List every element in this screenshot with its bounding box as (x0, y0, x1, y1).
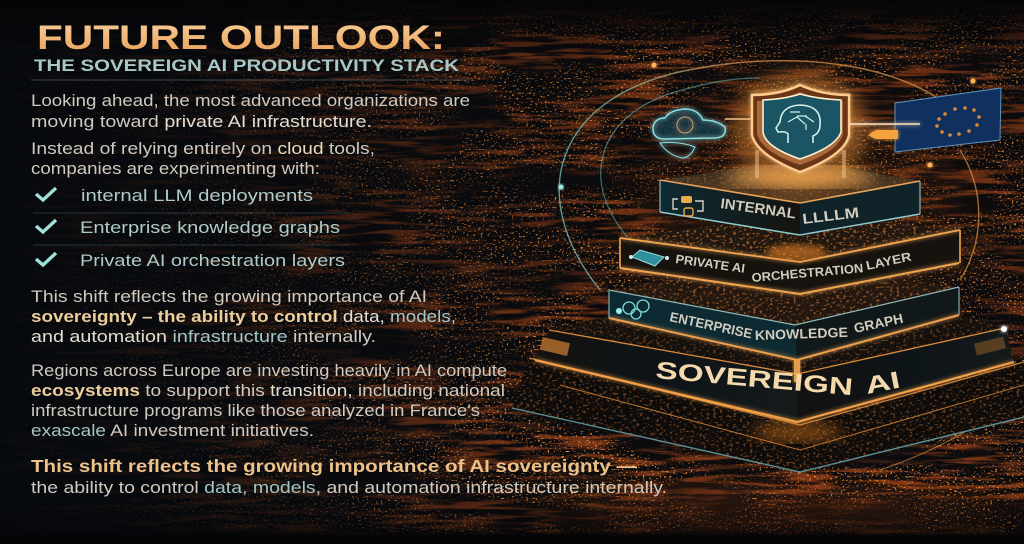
label: PRIVATE AI ORCHESTRATION LAYER: PRIVATE AI (675, 252, 746, 276)
callout: closing statement: the ability to control data, models, and automation infrastructure internally. (31, 478, 667, 497)
label: PRIVATE AI ORCHESTRATION LAYER: ORCHESTRATION (751, 261, 864, 285)
label: PRIVATE AI ORCHESTRATION LAYER (675, 250, 913, 285)
label: ENTERPRISE KNOWLEDGE GRAPH (668, 309, 905, 343)
label: INTERNAL LLLLM: LLLLM (802, 205, 860, 228)
tier: Sovereign AI base (535, 272, 1014, 422)
checklist (33, 186, 350, 270)
icon: connector to shield (725, 118, 752, 120)
arrow: flag to shield (850, 124, 920, 139)
text block: cloud tools (31, 139, 375, 178)
text block: AI sovereignty: This shift reflects the growing importance of AI (31, 287, 427, 306)
label: PRIVATE AI ORCHESTRATION LAYER: LAYER (865, 250, 913, 273)
label: ENTERPRISE KNOWLEDGE GRAPH: ENTERPRISE (668, 309, 754, 341)
item: enterprise knowledge graphs: Enterprise knowledge graphs (80, 218, 340, 237)
item: private AI orchestration layers: Private AI orchestration layers (80, 251, 345, 270)
text block: Europe compute: Regions across Europe are investing heavily in AI compute (31, 361, 507, 380)
text block: cloud tools: companies are experimenting with: (31, 159, 320, 178)
text block: Europe compute: ecosystems to support this transition, including national (31, 381, 505, 400)
tier: Internal LLM (660, 160, 920, 235)
icon: check 2 (36, 220, 56, 232)
label: SOVEREIGN AI: AI (863, 367, 903, 400)
icon: check 1 (36, 188, 56, 200)
text block: cloud tools: Instead of relying entirely on cloud tools, (31, 139, 375, 158)
lower platform (512, 358, 1024, 472)
label: SOVEREIGN AI: SOVEREIGN (654, 357, 854, 401)
text block: Europe compute: exascale AI investment initiatives. (31, 421, 314, 440)
title: FUTURE OUTLOOK: (37, 19, 445, 57)
label: INTERNAL LLLLM: INTERNAL (719, 196, 797, 223)
orbit arcs (558, 61, 1024, 470)
icon: LLM module (673, 196, 703, 216)
text block: private infrastructure intro: moving toward private AI infrastructure. (31, 112, 372, 131)
subtitle: THE SOVEREIGN AI PRODUCTIVITY STACK (34, 57, 459, 75)
icon: cloud (653, 109, 725, 158)
text block: AI sovereignty: and automation infrastructure internally. (31, 327, 376, 346)
item: internal LLM deployments: internal LLM deployments (81, 186, 313, 205)
icon: knowledge graph (616, 300, 649, 319)
tier: Private AI Orchestration Layer (620, 214, 960, 294)
text block: private infrastructure intro: Looking ahead, the most advanced organizations are (31, 91, 470, 110)
label: ENTERPRISE KNOWLEDGE GRAPH: KNOWLEDGE (755, 325, 848, 343)
text block: AI sovereignty: sovereignty – the ability to control data, models, (31, 307, 456, 326)
icon: head with circuit brain (776, 105, 820, 143)
icon: orchestration chip (629, 250, 669, 266)
text block: private infrastructure intro (31, 91, 470, 131)
tier: Enterprise Knowledge Graph (609, 262, 959, 360)
callout: closing statement (31, 456, 667, 497)
label: ENTERPRISE KNOWLEDGE GRAPH: GRAPH (853, 311, 905, 336)
icon: check 3 (36, 253, 56, 265)
label: INTERNAL LLLLM (719, 196, 860, 228)
text block: Europe compute: infrastructure programs like those analyzed in France's (31, 401, 480, 420)
callout: closing statement: This shift reflects the growing importance of AI sovereignty — (31, 456, 638, 476)
label: SOVEREIGN AI (654, 357, 903, 401)
text block: Europe compute (31, 361, 507, 440)
icon: EU flag (895, 88, 1001, 152)
icon: AI shield (725, 72, 875, 188)
text block: AI sovereignty (31, 287, 456, 346)
